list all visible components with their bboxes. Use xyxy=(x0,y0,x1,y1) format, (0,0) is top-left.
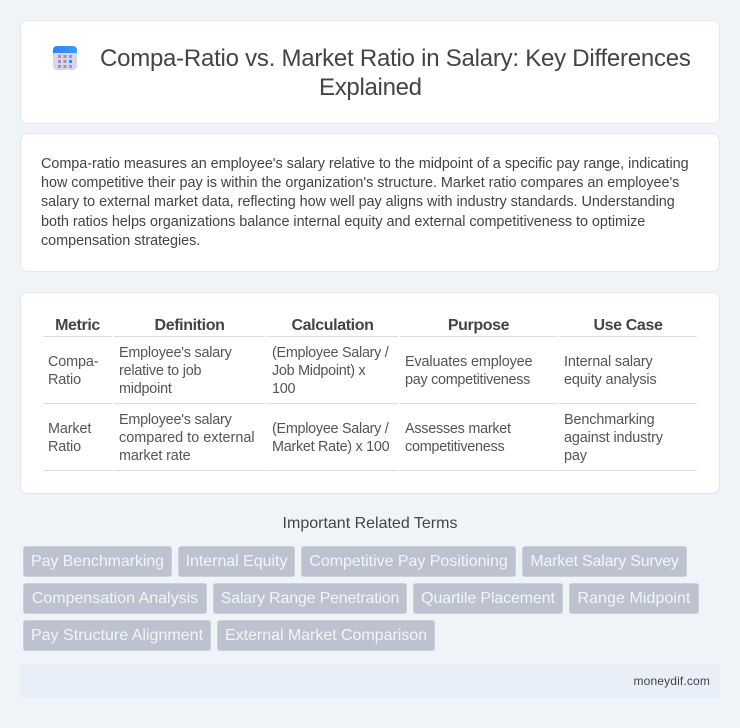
footer xyxy=(20,664,720,698)
table row: Compa-Ratio: Employee's salary xyxy=(119,345,232,361)
panel: header xyxy=(20,20,720,124)
icon: calendar xyxy=(53,46,77,70)
tag list: related terms xyxy=(23,546,699,651)
panel: comparison table xyxy=(20,292,720,494)
table row: Market Ratio: Assesses market xyxy=(405,421,511,437)
table header row: Purpose xyxy=(448,317,509,334)
tag list: related terms: Salary Range Penetration xyxy=(221,590,399,607)
title: Explained xyxy=(319,74,422,101)
table row: Compa-Ratio: Ratio xyxy=(48,372,81,388)
title xyxy=(100,45,691,101)
footer credit: moneydif.com xyxy=(634,674,710,688)
table row: Market Ratio: Market xyxy=(48,421,91,437)
title: Compa-Ratio vs. Market Ratio in Salary: Key Differences xyxy=(100,45,691,72)
table row: Compa-Ratio: relative to job xyxy=(119,363,201,379)
heading: related terms: Important Related Terms xyxy=(283,515,457,532)
table row: Market Ratio: Market Rate) x 100 xyxy=(272,439,389,455)
table row: Compa-Ratio: 100 xyxy=(272,381,295,397)
text block: introduction: how competitive their pay is within the organization's structure. Market ratio compares an employee's xyxy=(41,175,679,191)
panel: introduction xyxy=(20,133,720,272)
tag list: related terms: Pay Structure Alignment xyxy=(31,627,203,644)
table row: Compa-Ratio xyxy=(48,345,657,397)
table row: Compa-Ratio: Evaluates employee xyxy=(405,354,532,370)
table row: Market Ratio: market rate xyxy=(119,448,190,464)
table row: Compa-Ratio: Job Midpoint) x xyxy=(272,363,365,379)
table row: Compa-Ratio: equity analysis xyxy=(564,372,657,388)
text block: introduction xyxy=(41,156,689,249)
tag list: related terms: Quartile Placement xyxy=(421,590,555,607)
table row: Market Ratio: Employee's salary xyxy=(119,412,232,428)
tag list: related terms: Internal Equity xyxy=(186,553,287,570)
table row: Market Ratio: competitiveness xyxy=(405,439,504,455)
table row: Compa-Ratio: midpoint xyxy=(119,381,172,397)
table row: Market Ratio: Ratio xyxy=(48,439,81,455)
table row: Compa-Ratio: Internal salary xyxy=(564,354,653,370)
tag list: related terms: Pay Benchmarking xyxy=(31,553,164,570)
text block: introduction: Compa-ratio measures an employee's salary relative to the midpoint of a specific pay range, indicating xyxy=(41,156,689,172)
text block: introduction: both ratios helps organizations balance internal equity and external competitiveness to optimize xyxy=(41,214,645,230)
table row: Compa-Ratio: Compa- xyxy=(48,354,98,370)
tag list: related terms: Range Midpoint xyxy=(577,590,691,607)
tag list: related terms: Competitive Pay Positioning xyxy=(309,553,508,570)
tag list: related terms: Market Salary Survey xyxy=(530,553,679,570)
text block: introduction: compensation strategies. xyxy=(41,233,200,249)
tag list: related terms: External Market Comparison xyxy=(225,627,427,644)
table row: Market Ratio: compared to external xyxy=(119,430,255,446)
table row: Market Ratio: (Employee Salary / xyxy=(272,421,389,437)
table header row: Calculation xyxy=(291,317,374,334)
table row: Market Ratio: pay xyxy=(564,448,587,464)
tag list: related terms: Compensation Analysis xyxy=(32,590,198,607)
table header row: Definition xyxy=(155,317,224,334)
table row: Market Ratio: Benchmarking xyxy=(564,412,655,428)
table row: Market Ratio xyxy=(48,412,663,464)
table row: Market Ratio: against industry xyxy=(564,430,663,446)
table header row: Use Case xyxy=(593,317,662,334)
table row: Compa-Ratio: (Employee Salary / xyxy=(272,345,389,361)
table row: Compa-Ratio: pay competitiveness xyxy=(405,372,530,388)
table header row xyxy=(55,317,662,334)
table header row: Metric xyxy=(55,317,100,334)
text block: introduction: salary to external market data, reflecting how well pay aligns with industry standards. Understanding xyxy=(41,194,675,210)
